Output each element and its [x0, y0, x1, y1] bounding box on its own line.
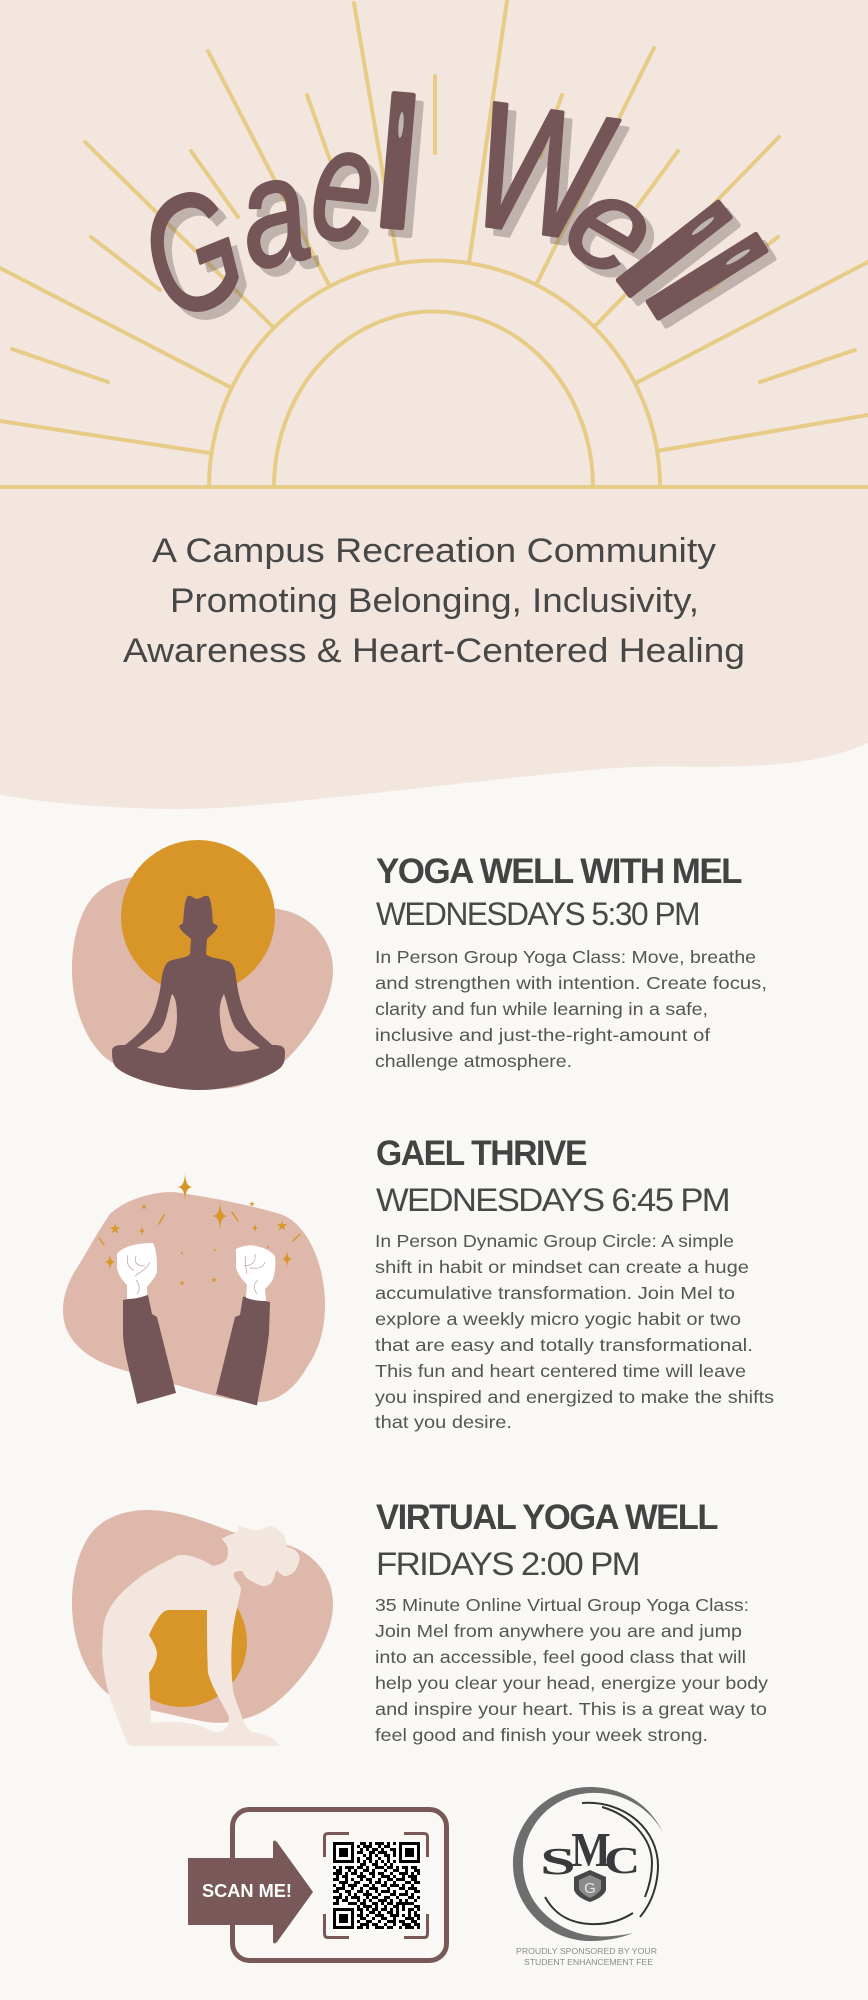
text block: Virtual Yoga Well: VIRTUAL YOGA WELL — [376, 1498, 718, 1537]
sponsor caption: STUDENT ENHANCEMENT FEE — [524, 1957, 653, 1967]
QR code — [332, 1840, 422, 1930]
arrow label: SCAN ME! — [202, 1880, 292, 1901]
title: Gael Well: e — [304, 92, 383, 276]
text block: Virtual Yoga Well: FRIDAYS 2:00 PM — [376, 1546, 639, 1582]
header wave panel — [0, 0, 868, 809]
text block: Virtual Yoga Well: feel good and finish your week strong. — [375, 1725, 708, 1745]
subtitle: A Campus Recreation Community — [152, 532, 717, 570]
text block: Virtual Yoga Well: help you clear your head, energize your body — [375, 1673, 768, 1693]
text block: Virtual Yoga Well: Join Mel from anywhere you are and jump — [375, 1621, 742, 1641]
shield letter: G — [584, 1880, 596, 1897]
title letter loops — [397, 112, 751, 267]
text block: Gael Thrive: shift in habit or mindset can create a huge — [375, 1257, 749, 1277]
shield — [574, 1870, 606, 1902]
text block: Yoga Well with Mel: and strengthen with intention. Create focus, — [375, 973, 767, 993]
text block: Gael Thrive: In Person Dynamic Group Circle: A simple — [375, 1231, 734, 1251]
QR call to action — [188, 1810, 446, 1960]
viewfinder brackets — [324, 1834, 428, 1938]
text block: Gael Thrive — [375, 1134, 774, 1432]
logo: SMC crescent monogram: S — [540, 1841, 576, 1883]
title: Gael Well: l — [580, 171, 764, 330]
text block: Gael Thrive: This fun and heart centered time will leave — [375, 1361, 746, 1381]
subtitle: Awareness & Heart-Centered Healing — [123, 632, 745, 670]
text block: Yoga Well with Mel — [375, 852, 767, 1071]
text block: Gael Thrive: that you desire. — [375, 1412, 512, 1432]
arrow: scan me — [188, 1840, 313, 1944]
logo: SMC crescent monogram: M — [571, 1823, 611, 1877]
subtitle: Promoting Belonging, Inclusivity, — [170, 582, 699, 620]
logo: SMC crescent monogram: C — [604, 1839, 640, 1882]
title: Gael Well — [116, 59, 801, 354]
text block: Yoga Well with Mel: YOGA WELL WITH MEL — [376, 852, 742, 891]
text block: Virtual Yoga Well: 35 Minute Online Virtual Group Yoga Class: — [375, 1595, 749, 1615]
title: Gael Well: l — [608, 205, 801, 350]
text block: Gael Thrive: explore a weekly micro yogic habit or two — [375, 1309, 741, 1329]
text block: Virtual Yoga Well: into an accessible, feel good class that will — [375, 1647, 746, 1667]
text block: Yoga Well with Mel: clarity and fun while learning in a safe, — [375, 999, 708, 1019]
text block: Virtual Yoga Well: and inspire your heart. This is a great way to — [375, 1699, 767, 1719]
logo: SMC crescent monogram — [513, 1787, 663, 1941]
sponsor caption — [516, 1946, 657, 1967]
text block: Yoga Well with Mel: inclusive and just-the-right-amount of — [375, 1025, 710, 1045]
text block: Yoga Well with Mel: WEDNESDAYS 5:30 PM — [376, 896, 699, 932]
illustration: sunrise rays and arches — [0, 1, 868, 487]
illustration: camel pose figure — [72, 1510, 333, 1746]
title: Gael Well: W — [460, 62, 626, 280]
illustration: meditating figure — [72, 840, 333, 1090]
text block: Gael Thrive: accumulative transformation. Join Mel to — [375, 1283, 735, 1303]
text block: Gael Thrive: that are easy and totally transformational. — [375, 1335, 753, 1355]
sponsor caption: PROUDLY SPONSORED BY YOUR — [516, 1946, 657, 1956]
text block: Gael Thrive: WEDNESDAYS 6:45 PM — [376, 1182, 729, 1218]
title: Gael Well: a — [222, 122, 322, 301]
title: Gael Well: e — [543, 143, 682, 308]
text block: Gael Thrive: you inspired and energized to make the shifts — [375, 1387, 774, 1407]
title: Gael Well: l — [365, 59, 430, 268]
text block: Yoga Well with Mel: challenge atmosphere. — [375, 1051, 572, 1071]
text block: Virtual Yoga Well — [375, 1498, 768, 1745]
illustration: raised fists with sparkles — [63, 1172, 325, 1406]
text block: Gael Thrive: GAEL THRIVE — [376, 1134, 586, 1173]
subtitle — [123, 532, 745, 670]
text block: Yoga Well with Mel: In Person Group Yoga Class: Move, breathe — [375, 947, 756, 967]
title: Gael Well: G — [116, 151, 268, 354]
